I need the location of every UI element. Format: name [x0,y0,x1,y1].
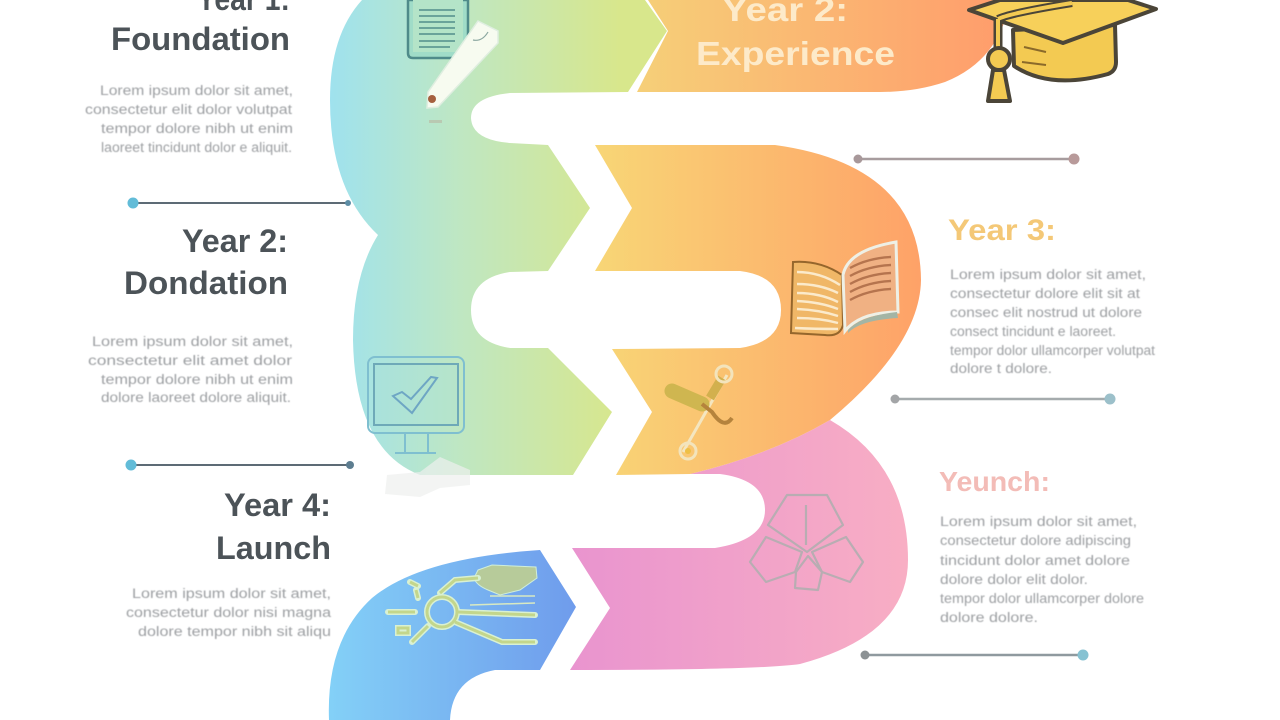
connector: year 3 [890,394,1116,404]
text block: yeunch: consectetur dolore adipiscing [940,533,1131,548]
text block: year 4 [126,586,332,639]
ribbon segment: orange year 2 [637,0,1010,92]
icon: tools [672,366,732,459]
heading: year 2 experience: Experience [696,35,895,72]
text block: yeunch: tempor dolor ullamcorper dolore [940,591,1144,606]
text block: year 4: dolore tempor nibh sit aliqu [138,624,331,639]
ribbon segment: orange year 3 [595,145,921,475]
text block: year 2 left: consectetur elit amet dolor [88,353,293,368]
ribbon segment: pink launch [570,420,908,670]
text block: year 1: tempor dolore nibh ut enim [101,121,293,136]
text block: year 1: Lorem ipsum dolor sit amet, [100,83,293,98]
connector: top right [854,154,1080,164]
text block: yeunch [940,514,1144,625]
text block: year 3: consectetur dolore elit sit at [950,286,1140,301]
text block: year 4: Lorem ipsum dolor sit amet, [132,586,331,601]
text block: yeunch: Lorem ipsum dolor sit amet, [940,514,1137,529]
heading: year 2 dondation [124,223,288,301]
icon: notebook and pencil [408,0,498,123]
text block: yeunch: dolore dolore. [940,610,1038,625]
ribbon segment: blue bottom [329,550,576,720]
text block: year 3: consect tincidunt e laoreet. [950,324,1116,339]
heading: year 2 dondation: Year 2: [182,223,288,259]
heading: year 1 foundation: Foundation [111,21,290,57]
text block: year 3: tempor dolor ullamcorper volutpat [950,343,1155,358]
connector: bottom right [860,650,1088,660]
text block: year 2 left [88,334,293,405]
heading: year 4 launch [216,487,331,566]
text block: year 1: consectetur elit dolor volutpat [85,102,292,117]
text block: year 3 [950,267,1155,376]
text block: year 3: dolore t dolore. [950,361,1052,376]
text block: yeunch: tincidunt dolor amet dolore [940,553,1130,568]
heading: year 4 launch: Year 4: [224,487,331,523]
heading: year 2 dondation: Dondation [124,265,288,301]
text block: year 2 left: Lorem ipsum dolor sit amet, [92,334,293,349]
text block: year 1: laoreet tincidunt dolor e aliquit. [101,140,292,155]
text block: year 3: Lorem ipsum dolor sit amet, [950,267,1146,282]
text block: year 3: consec elit nostrud ut dolore [950,305,1142,320]
icon: molecule network [750,495,863,590]
text block: yeunch: dolore dolor elit dolor. [940,572,1088,587]
icon: monitor with check [368,357,470,497]
heading: year 2 experience [696,0,895,72]
icon: graduation cap [969,0,1156,101]
text block: year 2 left: tempor dolore nibh ut enim [101,372,293,387]
heading: year 4 launch: Launch [216,530,331,566]
text block: year 2 left: dolore laoreet dolore aliquit. [101,390,291,405]
heading: year 3: Year 3: [948,214,1056,247]
ribbon segment: green foundation [330,0,667,475]
connector: year 2 [126,460,354,470]
icon: open book [791,242,898,335]
text block: year 1 [85,83,293,155]
connector: year 1 [128,198,351,208]
heading: yeunch: Yeunch: [939,466,1050,497]
icon: circuit diagram [388,565,537,642]
text block: year 4: consectetur dolor nisi magna [126,605,332,620]
heading: year 1 foundation [111,0,290,57]
